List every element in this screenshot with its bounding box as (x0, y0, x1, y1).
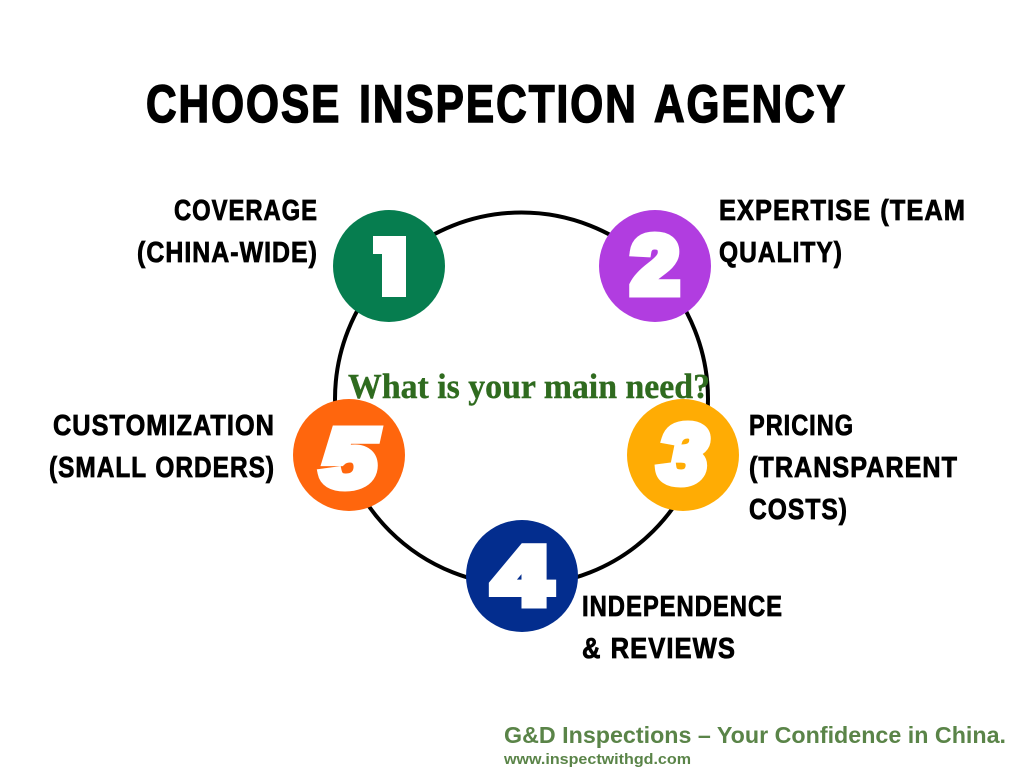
step 4: independence (466, 520, 783, 665)
badge 1: 1 (384, 227, 404, 305)
badge 2 (599, 210, 711, 322)
step 1: coverage (137, 195, 445, 322)
badge 4: 4 (493, 531, 551, 622)
label: pricing: PRICING (749, 410, 854, 442)
label: pricing (749, 410, 958, 526)
footer (503, 722, 1006, 768)
badge 3 (627, 399, 739, 511)
label: expertise: QUALITY) (719, 237, 843, 269)
label: coverage (137, 195, 318, 269)
step 5: customization (49, 399, 405, 511)
label: coverage: COVERAGE (174, 195, 318, 227)
badge 4 (466, 520, 578, 632)
footer tagline: G&D Inspections – Your Confidence in China. (504, 722, 1006, 748)
label: independence: INDEPENDENCE (582, 591, 783, 623)
label: pricing: COSTS) (749, 494, 848, 526)
label: customization: CUSTOMIZATION (53, 410, 275, 442)
badge 1 (333, 210, 445, 322)
step 2: expertise (599, 195, 966, 322)
badge 2: 2 (631, 220, 679, 311)
label: independence: & REVIEWS (582, 633, 736, 665)
label: customization (49, 410, 275, 484)
cycle ring (335, 212, 708, 586)
badge 5 (293, 399, 405, 511)
title: CHOOSE INSPECTION AGENCY (146, 75, 847, 134)
step 3: pricing (627, 399, 958, 526)
label: expertise: EXPERTISE (TEAM (719, 195, 966, 227)
label: independence (582, 591, 783, 665)
central question: What is your main need? (348, 367, 710, 406)
label: customization: (SMALL ORDERS) (49, 452, 275, 484)
badge 5: 5 (322, 413, 378, 504)
badge 3: 3 (659, 409, 707, 500)
label: pricing: (TRANSPARENT (749, 452, 958, 484)
footer website: www.inspectwithgd.com (503, 751, 691, 768)
label: expertise (719, 195, 966, 269)
label: coverage: (CHINA-WIDE) (137, 237, 318, 269)
